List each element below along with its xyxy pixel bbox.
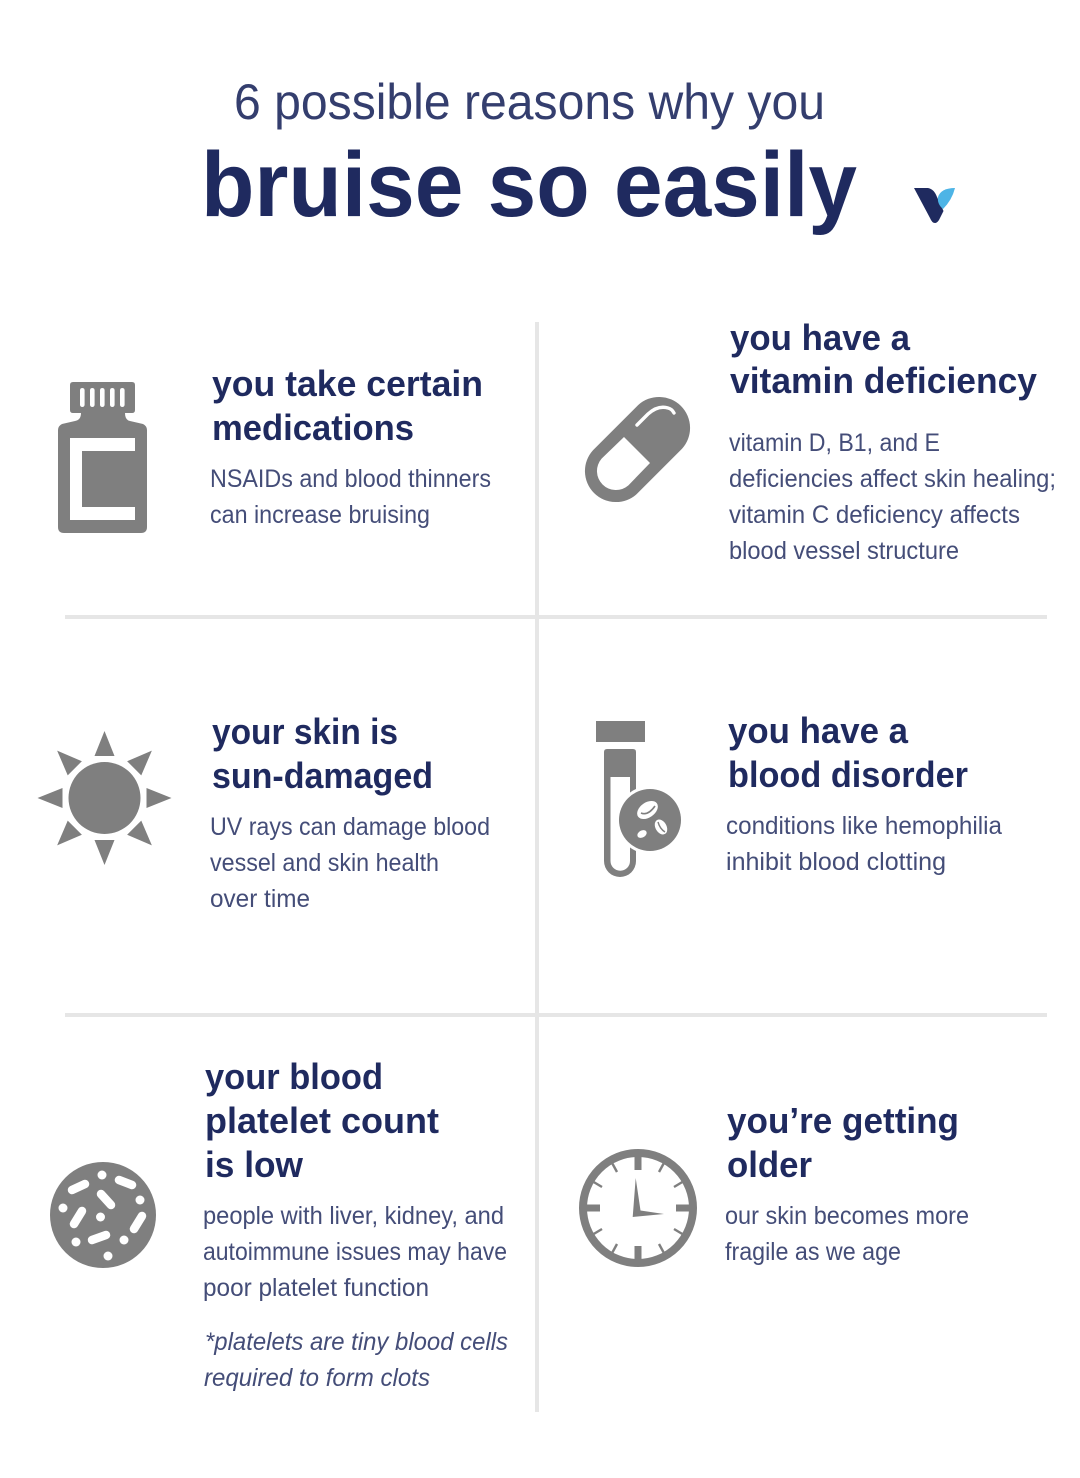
heading: low platelet count: platelet count xyxy=(205,1100,439,1141)
heading: getting older: you’re getting xyxy=(727,1100,959,1141)
heading: getting older xyxy=(727,1100,959,1185)
footnote: platelets: *platelets are tiny blood cells xyxy=(205,1328,508,1356)
heading: blood disorder: blood disorder xyxy=(728,754,968,795)
panel: getting older xyxy=(583,1100,969,1266)
heading: getting older: older xyxy=(727,1144,812,1185)
text: blood disorder xyxy=(726,812,1002,876)
heading: sun damage: sun-damaged xyxy=(212,755,433,796)
text: blood disorder: conditions like hemophilia xyxy=(726,812,1002,840)
heading: blood disorder xyxy=(728,710,968,795)
text: sun damage: vessel and skin health xyxy=(210,849,439,877)
footnote: platelets: required to form clots xyxy=(204,1364,430,1392)
text: low platelet count: autoimmune issues may have xyxy=(203,1238,507,1266)
text: blood disorder: inhibit blood clotting xyxy=(726,848,946,876)
panel: vitamin deficiency xyxy=(585,317,1056,565)
text: medications: can increase bruising xyxy=(210,501,430,529)
text: low platelet count: poor platelet function xyxy=(203,1274,429,1302)
heading: low platelet count: is low xyxy=(205,1144,304,1185)
text: getting older xyxy=(725,1202,969,1266)
text: vitamin deficiency: vitamin D, B1, and E xyxy=(729,429,940,457)
heading: medications xyxy=(212,363,483,448)
text: getting older: fragile as we age xyxy=(725,1238,901,1266)
heading: sun damage xyxy=(212,711,433,796)
text: medications: NSAIDs and blood thinners xyxy=(210,465,491,493)
heading: vitamin deficiency xyxy=(730,317,1037,401)
text: sun damage xyxy=(210,813,490,913)
footnote: platelets xyxy=(204,1328,508,1392)
text: vitamin deficiency: vitamin C deficiency affects xyxy=(729,501,1020,529)
heading: low platelet count: your blood xyxy=(205,1056,383,1097)
icon: test tube xyxy=(596,721,684,877)
heading: sun damage: your skin is xyxy=(212,711,398,752)
icon: sun xyxy=(38,731,172,865)
heading: vitamin deficiency: you have a xyxy=(730,317,911,358)
text: low platelet count xyxy=(203,1202,507,1302)
icon: capsule xyxy=(585,397,690,502)
heading: vitamin deficiency: vitamin deficiency xyxy=(730,360,1037,401)
icon: clock xyxy=(583,1153,693,1263)
heading: low platelet count xyxy=(205,1056,439,1185)
title: 6 possible reasons why you xyxy=(234,74,825,130)
title: bruise so easily xyxy=(201,134,857,236)
panel: low platelet count xyxy=(50,1056,508,1392)
text: sun damage: over time xyxy=(210,885,310,913)
panel: medications xyxy=(58,363,491,533)
text: low platelet count: people with liver, kidney, and xyxy=(203,1202,504,1230)
heading: medications: you take certain xyxy=(212,363,483,404)
heading: medications: medications xyxy=(212,407,414,448)
text: vitamin deficiency: deficiencies affect skin healing; xyxy=(729,465,1056,493)
heading: blood disorder: you have a xyxy=(728,710,909,751)
title xyxy=(201,74,857,236)
text: medications xyxy=(210,465,491,529)
text: vitamin deficiency: blood vessel structure xyxy=(729,537,959,565)
text: vitamin deficiency xyxy=(729,429,1056,565)
text: sun damage: UV rays can damage blood xyxy=(210,813,490,841)
icon: brand logo xyxy=(914,188,955,223)
panel: sun damage xyxy=(38,711,490,913)
text: getting older: our skin becomes more xyxy=(725,1202,969,1230)
icon: pill bottle xyxy=(58,382,147,533)
panel: blood disorder xyxy=(596,710,1002,877)
icon: platelets xyxy=(50,1162,156,1268)
